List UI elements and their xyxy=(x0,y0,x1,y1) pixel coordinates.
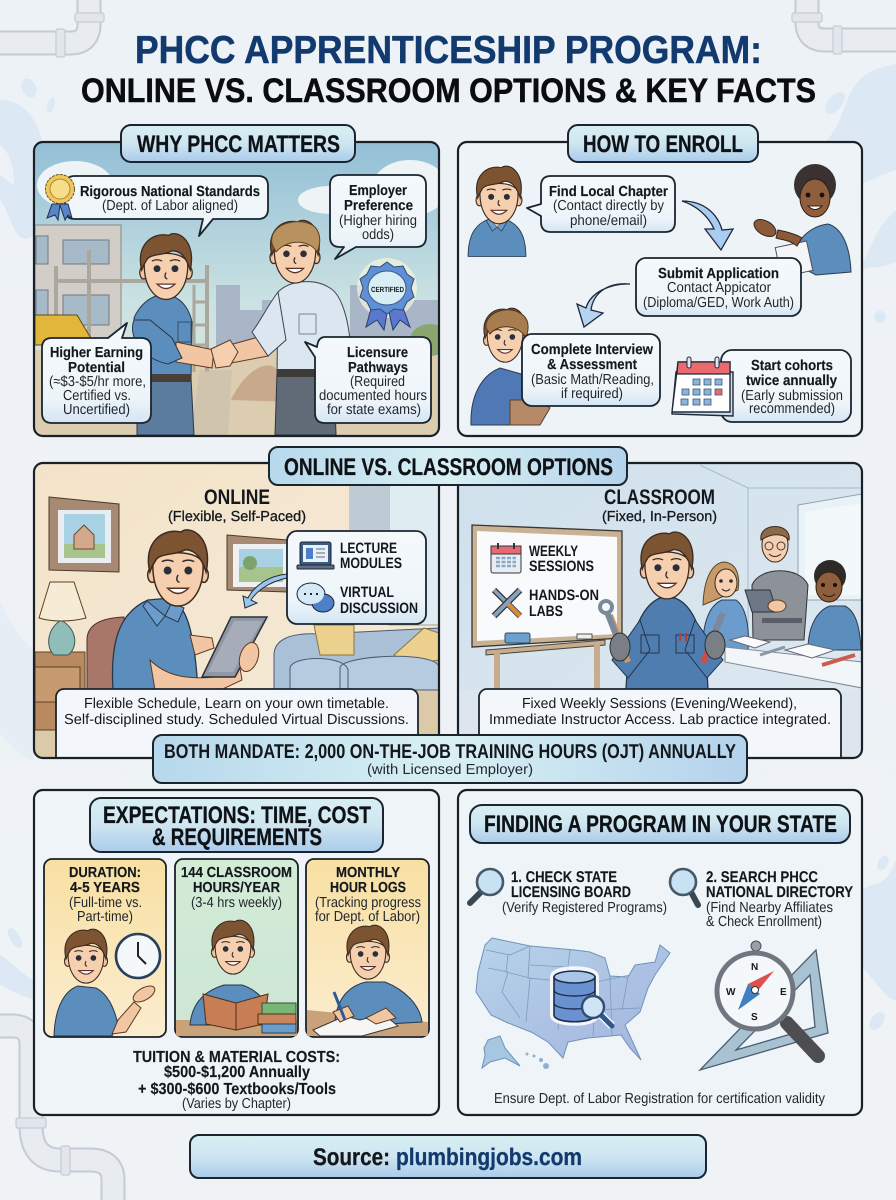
bubble: higher earning potential: Potential xyxy=(68,360,125,376)
title: PHCC APPRENTICESHIP PROGRAM: xyxy=(135,29,762,72)
framed pictures xyxy=(49,497,287,592)
callout: both mandate OJT: BOTH MANDATE: 2,000 ON-THE-JOB TRAINING HOURS (OJT) ANNUALLY xyxy=(164,741,737,763)
text block: tuition and material costs xyxy=(133,1049,340,1112)
arrow: to learner xyxy=(243,574,287,608)
text block: tuition and material costs: + $300-$600 Textbooks/Tools xyxy=(138,1081,336,1098)
icon: calendar xyxy=(672,357,733,416)
bubble: higher earning potential: Higher Earning xyxy=(50,345,143,361)
bubble: employer preference xyxy=(330,175,426,259)
step: check state licensing board: (Verify Registered Programs) xyxy=(502,900,667,916)
step: start cohorts: (Early submission xyxy=(741,388,843,404)
card: duration: Part-time) xyxy=(77,909,133,925)
icon: laptop xyxy=(297,542,334,569)
icon: magnifier 2 xyxy=(670,869,698,905)
step: complete interview and assessment xyxy=(522,334,660,406)
person with clock xyxy=(54,929,160,1036)
callout: lecture modules and virtual discussion xyxy=(287,531,426,624)
bubble: employer preference: Employer xyxy=(349,183,407,199)
icon: magnifier 1 xyxy=(470,869,503,903)
panel: classroom option: SESSIONS xyxy=(529,558,594,575)
card: classroom hours: (3-4 hrs weekly) xyxy=(191,895,282,911)
arrow: application to interview xyxy=(577,284,630,327)
person: classroom apprentice with wrenches xyxy=(600,532,725,690)
panel: online option xyxy=(34,463,439,779)
person writing in log xyxy=(307,925,428,1036)
icon: crossed tools xyxy=(494,590,520,616)
map: United States with database xyxy=(476,938,670,1069)
person: student girl xyxy=(703,562,748,650)
step: submit application: Contact Appicator xyxy=(667,280,771,296)
panel: classroom option xyxy=(457,463,862,779)
arrow: chapter to application xyxy=(682,201,733,250)
bubble: rigorous national standards xyxy=(65,176,268,236)
heading: why PHCC matters: WHY PHCC MATTERS xyxy=(137,131,340,158)
card: monthly hour logs: HOUR LOGS xyxy=(330,880,406,896)
heading: how to enroll xyxy=(568,125,758,162)
card: classroom hours: HOURS/YEAR xyxy=(193,880,280,896)
step: search PHCC national directory: & Check Enrollment) xyxy=(706,914,822,930)
heading: expectations: & REQUIREMENTS xyxy=(152,824,322,851)
step: find local chapter: Find Local Chapter xyxy=(549,184,668,200)
step: complete interview and assessment: Complete Interview xyxy=(531,342,654,358)
person: apprentice shaking hands xyxy=(132,234,214,435)
caption box: online: Flexible Schedule, Learn on your own timetable. xyxy=(84,696,389,712)
step: complete interview and assessment: if required) xyxy=(561,386,623,402)
callout: lecture modules and virtual discussion: LECTURE xyxy=(340,540,397,557)
step: start cohorts: twice annually xyxy=(746,373,837,389)
heading: classroom xyxy=(602,486,717,525)
heading: online vs classroom options: ONLINE VS. CLASSROOM OPTIONS xyxy=(284,454,613,481)
step: start cohorts: recommended) xyxy=(749,401,835,417)
heading: expectations: EXPECTATIONS: TIME, COST xyxy=(103,802,371,829)
source bar xyxy=(190,1135,706,1178)
callout: both mandate OJT xyxy=(153,735,747,783)
bubble: licensure pathways: Pathways xyxy=(348,360,408,376)
person: online learner with tablet xyxy=(112,530,267,695)
step: search PHCC national directory xyxy=(706,869,854,930)
bubble: licensure pathways: for state exams) xyxy=(327,402,421,418)
card: monthly hour logs: for Dept. of Labor) xyxy=(315,909,420,925)
card: duration: 4-5 YEARS xyxy=(70,880,140,896)
step: search PHCC national directory: 2. SEARCH PHCC xyxy=(706,869,818,886)
card: classroom hours xyxy=(175,859,298,1037)
card: duration: (Full-time vs. xyxy=(69,895,142,911)
person: applicant with paper xyxy=(751,164,851,277)
step: complete interview and assessment: & Assessment xyxy=(547,357,637,373)
bubble: rigorous national standards: (Dept. of Labor aligned) xyxy=(102,198,238,214)
bubble: licensure pathways: documented hours xyxy=(319,388,427,404)
callout: lecture modules and virtual discussion: MODULES xyxy=(340,555,402,572)
caption box: classroom: Immediate Instructor Access. Lab practice integrated. xyxy=(489,712,831,728)
heading: online: (Flexible, Self-Paced) xyxy=(168,509,306,525)
bubble: employer preference: (Higher hiring xyxy=(339,213,417,229)
step: submit application: (Diploma/GED, Work Auth) xyxy=(643,295,794,311)
panel: why PHCC matters xyxy=(34,125,450,436)
person: student at table xyxy=(808,560,861,650)
heading: online: ONLINE xyxy=(204,486,270,509)
step: check state licensing board: 1. CHECK STATE xyxy=(511,869,617,886)
person: student completing interview xyxy=(471,308,550,425)
icon: gold medal ribbon xyxy=(46,174,74,220)
step: search PHCC national directory: NATIONAL DIRECTORY xyxy=(706,884,854,901)
title: ONLINE VS. CLASSROOM OPTIONS & KEY FACTS xyxy=(81,72,816,110)
icon: compass, magnifier and set square xyxy=(700,941,828,1070)
step: submit application xyxy=(636,258,801,316)
bubble: higher earning potential: Uncertified) xyxy=(63,402,130,418)
bubble: higher earning potential: (≈$3-$5/hr more, xyxy=(49,374,146,390)
bubble: employer preference: Preference xyxy=(344,198,413,214)
step: find local chapter xyxy=(527,176,675,232)
lamp and side table xyxy=(35,582,86,730)
bubble: employer preference: odds) xyxy=(362,227,394,243)
step: submit application: Submit Application xyxy=(658,266,779,282)
panel: expectations xyxy=(34,790,439,1115)
icon: compass, magnifier and set square: S xyxy=(751,1012,758,1023)
caption box: classroom: Fixed Weekly Sessions (Evening/Weekend), xyxy=(522,696,797,712)
heading: online vs classroom options xyxy=(269,447,627,485)
bubble: rigorous national standards: Rigorous National Standards xyxy=(80,184,260,200)
heading: online xyxy=(168,486,306,525)
icon: certified rosette xyxy=(357,258,417,330)
table tools xyxy=(730,636,855,665)
panel: classroom option: LABS xyxy=(529,603,563,620)
person: student finding chapter xyxy=(468,166,526,256)
source bar: plumbingjobs.com xyxy=(396,1144,582,1171)
sofa xyxy=(274,625,439,690)
text block: tuition and material costs: $500-$1,200 Annually xyxy=(164,1064,310,1081)
person: employer shaking hands xyxy=(211,220,350,435)
icon: calendar xyxy=(491,543,521,573)
icon: chat bubbles xyxy=(297,583,334,612)
classroom table xyxy=(725,647,862,688)
heading: finding a program xyxy=(470,805,850,843)
step: find local chapter: (Contact directly by xyxy=(553,198,665,214)
caption box: online: Self-disciplined study. Scheduled Virtual Discussions. xyxy=(64,712,409,728)
step: find local chapter: phone/email) xyxy=(570,213,647,229)
panel: classroom option: HANDS-ON xyxy=(529,587,599,604)
panel: classroom option: WEEKLY xyxy=(529,543,578,560)
title xyxy=(81,29,816,110)
icon: compass, magnifier and set square: E xyxy=(780,987,787,998)
bubble: higher earning potential xyxy=(42,323,151,423)
callout: both mandate OJT: (with Licensed Employer) xyxy=(367,762,533,778)
card: monthly hour logs xyxy=(306,859,429,1037)
icon: certified rosette: CERTIFIED xyxy=(371,285,404,294)
step: check state licensing board: LICENSING BOARD xyxy=(511,884,631,901)
callout: lecture modules and virtual discussion: DISCUSSION xyxy=(340,600,418,617)
icon: compass, magnifier and set square: W xyxy=(726,987,736,998)
step: complete interview and assessment: (Basic Math/Reading, xyxy=(531,372,654,388)
step: start cohorts: Start cohorts xyxy=(751,358,833,374)
icon: compass, magnifier and set square: N xyxy=(751,962,758,973)
whiteboard xyxy=(472,525,622,690)
bubble: licensure pathways: Licensure xyxy=(347,345,408,361)
heading: classroom: CLASSROOM xyxy=(604,486,715,509)
heading: expectations xyxy=(90,798,383,852)
panel: finding a program in your state xyxy=(458,790,862,1115)
source bar: Source: xyxy=(313,1144,390,1171)
callout: lecture modules and virtual discussion: VIRTUAL xyxy=(340,584,394,601)
person reading with books xyxy=(176,920,297,1036)
caption box: classroom xyxy=(478,688,842,757)
heading: how to enroll: HOW TO ENROLL xyxy=(583,131,743,158)
step: search PHCC national directory: (Find Nearby Affiliates xyxy=(706,900,833,916)
bubble: higher earning potential: Certified vs. xyxy=(63,388,131,404)
card: duration: DURATION: xyxy=(69,865,141,881)
card: monthly hour logs: MONTHLY xyxy=(336,865,400,881)
panel: how to enroll xyxy=(458,125,862,436)
heading: classroom: (Fixed, In-Person) xyxy=(602,509,717,525)
card: monthly hour logs: (Tracking progress xyxy=(315,895,421,911)
heading: why PHCC matters xyxy=(121,125,355,162)
step: start cohorts xyxy=(721,350,851,422)
card: classroom hours: 144 CLASSROOM xyxy=(181,865,292,881)
chair xyxy=(87,617,124,690)
text block: tuition and material costs: (Varies by Chapter) xyxy=(182,1096,291,1112)
step: check state licensing board xyxy=(502,869,667,916)
bubble: licensure pathways: (Required xyxy=(350,374,405,390)
text block: tuition and material costs: TUITION & MATERIAL COSTS: xyxy=(133,1049,340,1066)
caption box: online xyxy=(55,688,419,757)
person: instructor with tablet xyxy=(745,526,808,640)
bubble: licensure pathways xyxy=(305,337,431,423)
footer note: Ensure Dept. of Labor Registration for certification validity xyxy=(494,1091,826,1107)
card: duration xyxy=(44,859,166,1037)
